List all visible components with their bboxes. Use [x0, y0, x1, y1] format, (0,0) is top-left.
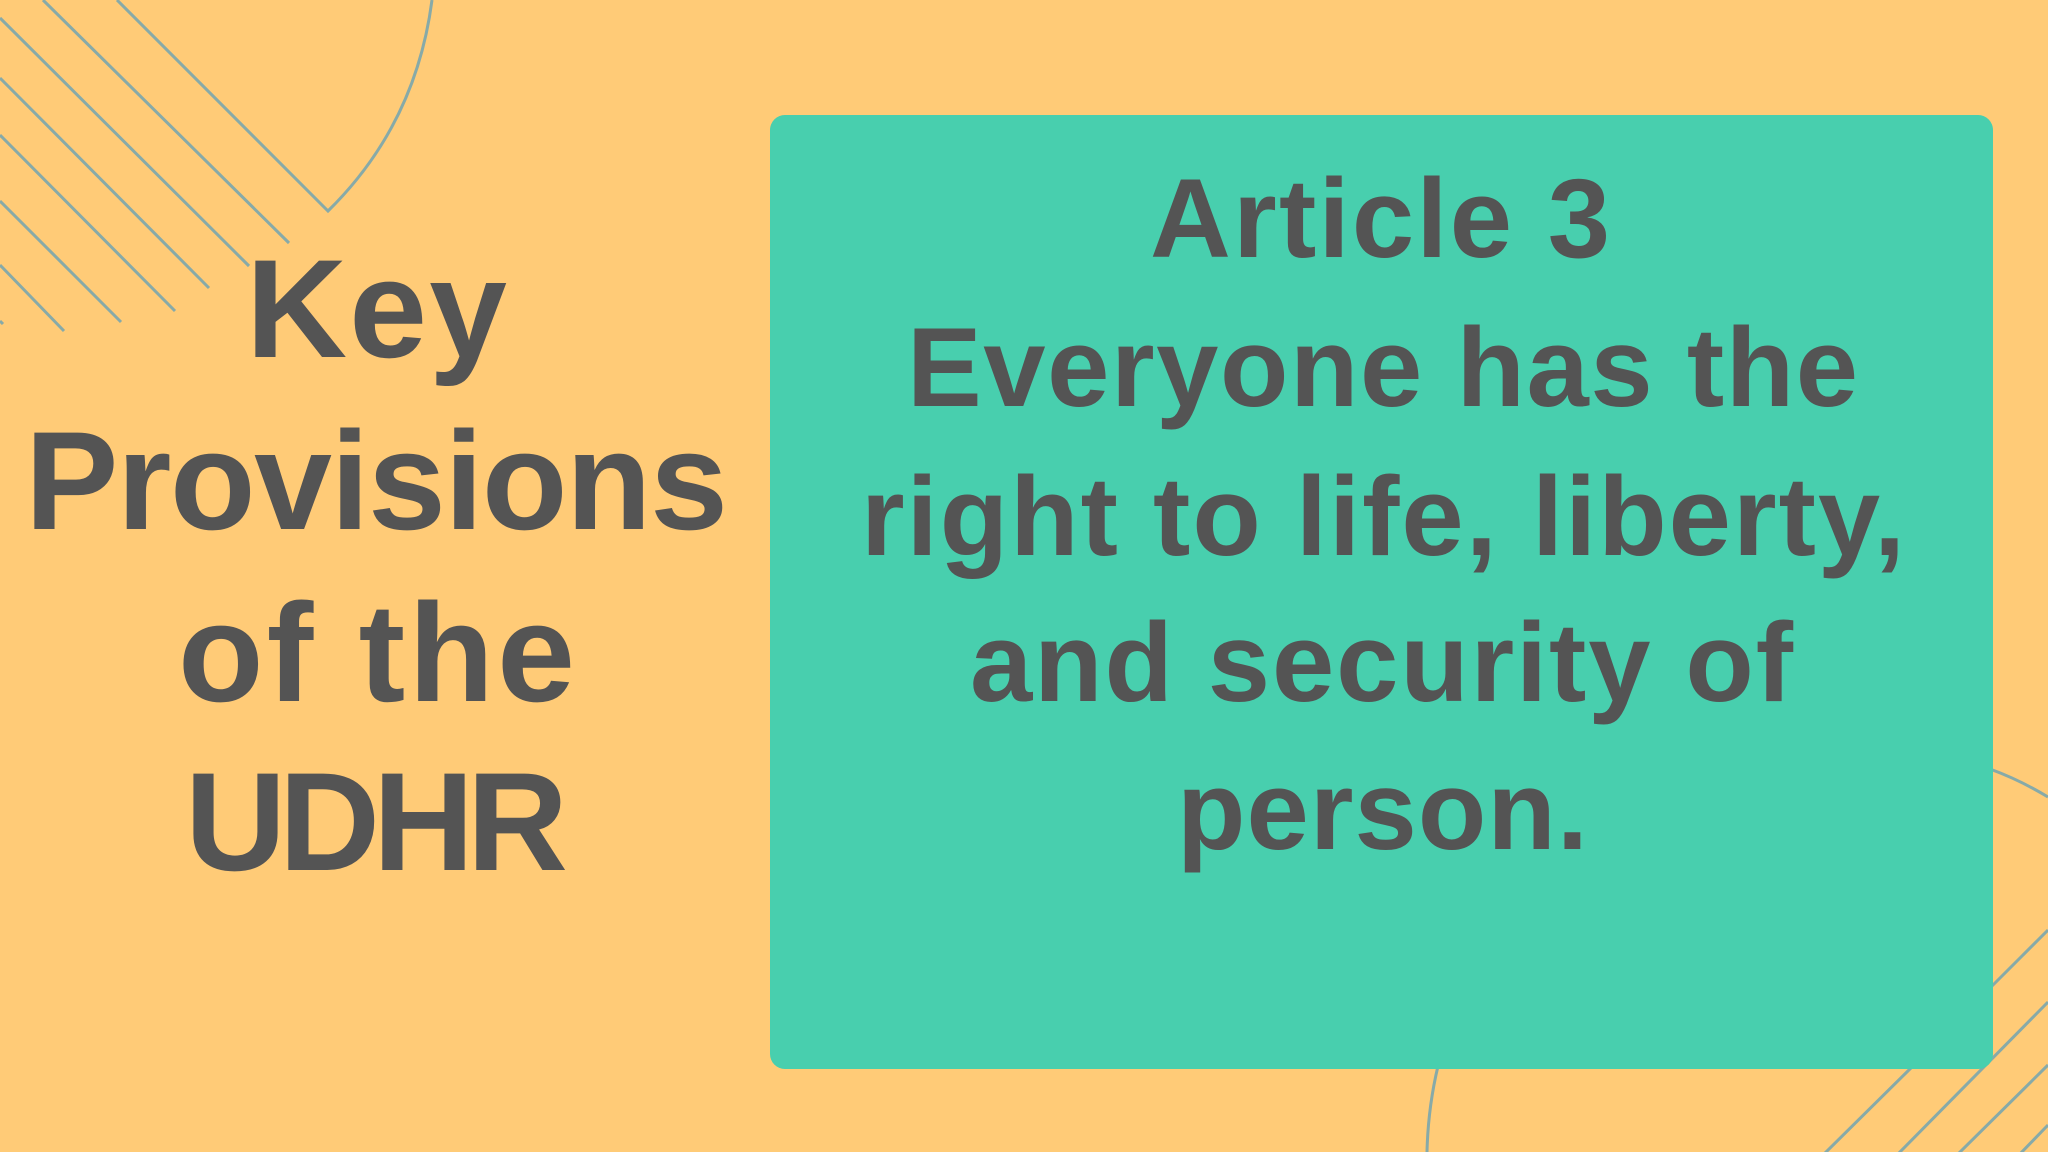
decoration: top-left line and arc pattern: [0, 0, 432, 331]
decoration: bottom-right line and arc pattern: [1427, 769, 2048, 1152]
panel: Article 3: [770, 115, 1993, 1069]
text block: Article 3 statement: and security of: [970, 600, 1794, 725]
text block: Article 3 statement: right to life, liberty,: [861, 454, 1905, 579]
heading: Key Provisions of the UDHR: Key: [246, 230, 507, 387]
heading: Key Provisions of the UDHR: of the: [178, 574, 575, 731]
text block: Article 3 statement: Everyone has the: [907, 305, 1858, 430]
heading: Key Provisions of the UDHR: [25, 230, 728, 900]
heading: Key Provisions of the UDHR: UDHR: [185, 743, 568, 900]
text block: Article 3 statement: [861, 156, 1905, 873]
text block: Article 3 statement: Article 3: [1150, 156, 1610, 281]
text block: Article 3 statement: person.: [1177, 748, 1588, 873]
heading: Key Provisions of the UDHR: Provisions: [25, 402, 728, 559]
